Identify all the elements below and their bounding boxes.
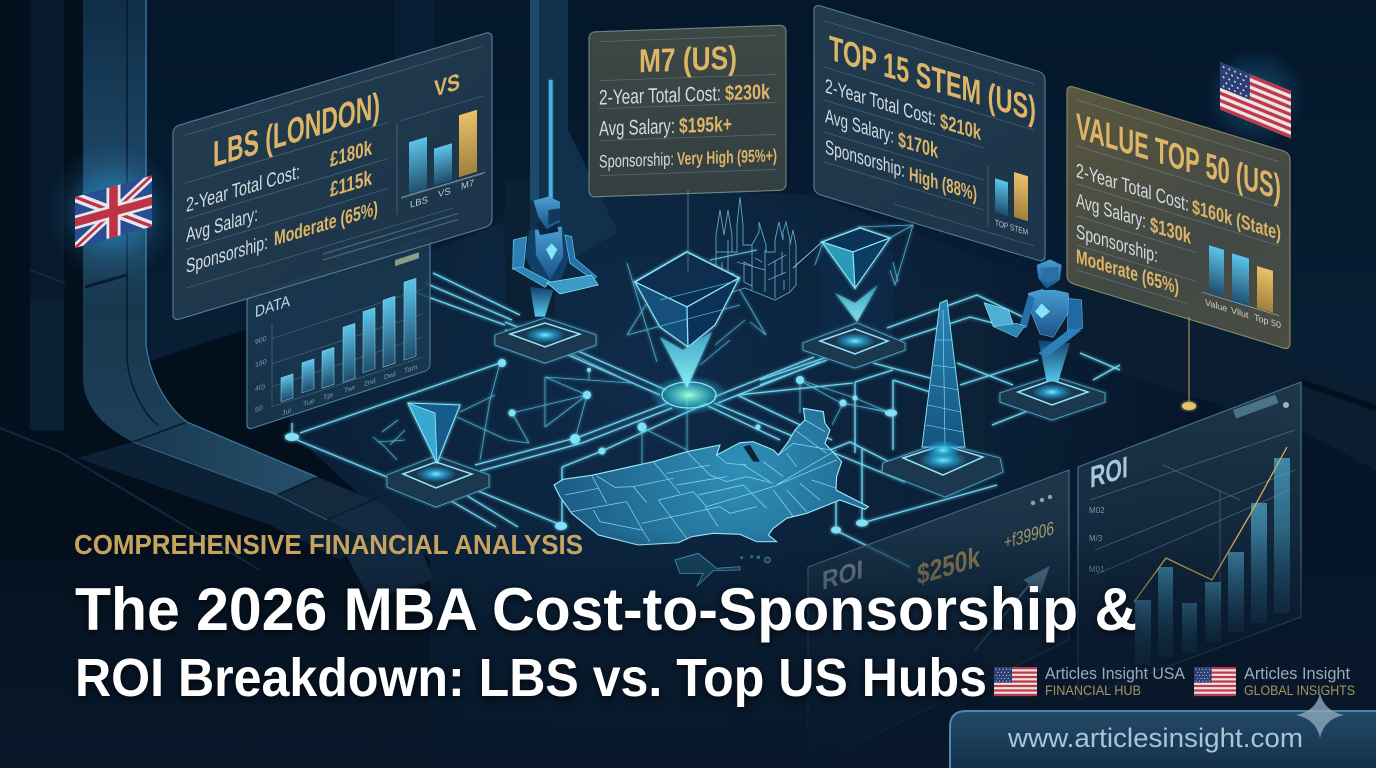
bottom fade: [0, 530, 1376, 768]
axis labels: Tam: [404, 363, 417, 375]
icon: right robot: [984, 259, 1083, 382]
window dots: [1031, 495, 1052, 505]
row: sponsorship: High (88%): [909, 163, 977, 206]
axis labels: Dwl: [384, 370, 396, 382]
icon: US flag upper right: [1206, 48, 1306, 144]
axis labels: 40): [255, 382, 265, 393]
axis labels: 50: [255, 404, 263, 414]
heading: M7 (US): M7 (US): [639, 39, 737, 79]
title: The 2026 MBA Cost-to-Sponsorship &: [75, 576, 1137, 643]
axis labels: Twr: [344, 383, 356, 395]
title: [75, 576, 1137, 708]
icon: glowing hub: [649, 375, 729, 415]
row: salary: $130k: [1150, 213, 1191, 249]
panel: M7 US: [589, 25, 786, 197]
trend line: [1134, 447, 1287, 602]
axis labels: [1089, 506, 1105, 574]
platform: left robot base: [495, 318, 596, 363]
bar chart: value: [1202, 243, 1281, 330]
row: cost: 2-Year Total Cost:: [186, 160, 300, 217]
bar chart: value: Value: [1205, 297, 1227, 314]
bar chart: value: Top 50: [1254, 312, 1281, 330]
footer website badge: [950, 711, 1376, 768]
row: sponsorship: Sponsorship:: [599, 149, 674, 172]
eyebrow heading: COMPREHENSIVE FINANCIAL ANALYSIS: [74, 529, 583, 560]
icon: tower: [922, 300, 965, 460]
axis labels: 900: [255, 335, 267, 346]
row: sponsorship: Very High (95%+): [677, 145, 777, 169]
row: sponsorship: [599, 145, 777, 172]
row: sponsorship: Sponsorship:: [825, 136, 905, 182]
axis labels: M02: [1089, 506, 1105, 515]
bar chart: [1135, 458, 1290, 665]
row: sponsorship: Moderate (65%): [1076, 245, 1179, 299]
bar chart: top stem: [988, 164, 1028, 238]
heading: DATA: DATA: [255, 292, 290, 321]
panel: LBS London: [173, 31, 492, 321]
logo: Articles Insight USA: [994, 664, 1186, 698]
row: cost: 2-Year Total Cost:: [1076, 159, 1189, 216]
row: cost: $230k: [725, 81, 770, 105]
row: salary: [186, 166, 372, 247]
row: cost: £180k: [330, 136, 372, 172]
icon: cathedral outline: [710, 197, 822, 300]
row: cost: $210k: [940, 109, 981, 145]
platform: right robot base: [1000, 376, 1105, 420]
map of the United States: [554, 408, 868, 545]
panel: large ROI chart: [1078, 382, 1301, 700]
icon: sparkle: [1296, 693, 1344, 738]
icon: trend arrow: [975, 568, 1048, 650]
bar chart: LBS vs M7: [397, 97, 485, 215]
row: cost: $160k (State): [1192, 196, 1281, 245]
map inset: Alaska and Hawaii: [675, 553, 770, 587]
row: salary: Avg Salary:: [599, 115, 675, 141]
row: cost: 2-Year Total Cost:: [825, 75, 936, 130]
axis labels: [255, 285, 417, 426]
icon: UK flag: [69, 173, 156, 251]
axis labels: Tpr: [323, 390, 334, 402]
axis labels: M/3: [1089, 534, 1103, 543]
panel: Value Top 50 US: [1067, 85, 1290, 350]
label: VS: VS: [434, 68, 460, 102]
row: salary: Avg Salary:: [1076, 189, 1146, 233]
icon: left prism: [373, 395, 495, 463]
row: sponsorship: Moderate (65%): [274, 197, 378, 251]
row: cost: [1076, 159, 1281, 245]
title: ROI Breakdown: LBS vs. Top US Hubs: [75, 648, 987, 708]
logo: Articles Insight Global: GLOBAL INSIGHTS: [1244, 683, 1355, 698]
logo: Articles Insight Global: Articles Insight: [1244, 664, 1350, 683]
bar chart: top stem: TOP STEM: [995, 217, 1028, 237]
bar chart: value: Vllut: [1231, 305, 1249, 320]
platform: cube base: [803, 323, 905, 368]
label: ROI: ROI: [822, 554, 863, 596]
panel: DATA chart: [247, 237, 430, 430]
bar chart: LBS vs M7: VS: [438, 186, 451, 200]
row: sponsorship: [825, 136, 977, 206]
value: +f39906: +f39906: [1004, 517, 1054, 554]
axis labels: Jul: [282, 407, 291, 417]
network circuit lines: [285, 273, 1120, 567]
heading: TOP 15 STEM (US): TOP 15 STEM (US): [829, 28, 1036, 129]
heading: LBS (LONDON): LBS (LONDON): [213, 85, 380, 175]
bar chart: LBS vs M7: LBS: [410, 195, 428, 211]
panel: Top 15 STEM US: [814, 4, 1045, 262]
icon: gold pin line: [1182, 317, 1196, 410]
row: salary: Avg Salary:: [186, 203, 258, 247]
value: $250k: $250k: [917, 541, 980, 592]
platform: left prism base: [387, 456, 489, 507]
row: salary: $195k+: [679, 113, 732, 138]
row: sponsorship: Sponsorship:: [1076, 220, 1158, 268]
platform: tower base: [882, 443, 1003, 497]
bar chart: [281, 278, 416, 403]
footer website badge: www.articlesinsight.com: [1007, 723, 1303, 753]
row: salary: $170k: [898, 128, 938, 163]
row: salary: Avg Salary:: [825, 105, 894, 148]
axis labels: M01: [1089, 565, 1105, 574]
panel: small ROI card: [808, 470, 1069, 768]
logo: Articles Insight USA: Articles Insight USA: [1045, 664, 1186, 683]
icon: left robot: [513, 197, 598, 317]
axis labels: 160: [255, 358, 267, 369]
row: sponsorship: [1076, 220, 1179, 299]
icon: cube crystal: [815, 225, 913, 322]
icon: M7 connector line: [687, 190, 689, 272]
row: salary: £115k: [330, 166, 372, 202]
row: cost: 2-Year Total Cost:: [599, 82, 721, 110]
axis labels: Tue: [303, 397, 315, 408]
bar chart: LBS vs M7: M7: [461, 178, 474, 193]
center vertical column: [505, 0, 618, 320]
axis labels: 2nd: [364, 377, 376, 388]
left structural column: [47, 0, 433, 600]
logo: Articles Insight USA: FINANCIAL HUB: [1045, 683, 1141, 698]
icon: main crystal: [627, 250, 766, 388]
row: sponsorship: Sponsorship:: [186, 231, 268, 278]
logo: Articles Insight Global: [1194, 664, 1355, 698]
row: sponsorship: [186, 197, 378, 278]
label: ROI: ROI: [1090, 450, 1128, 495]
